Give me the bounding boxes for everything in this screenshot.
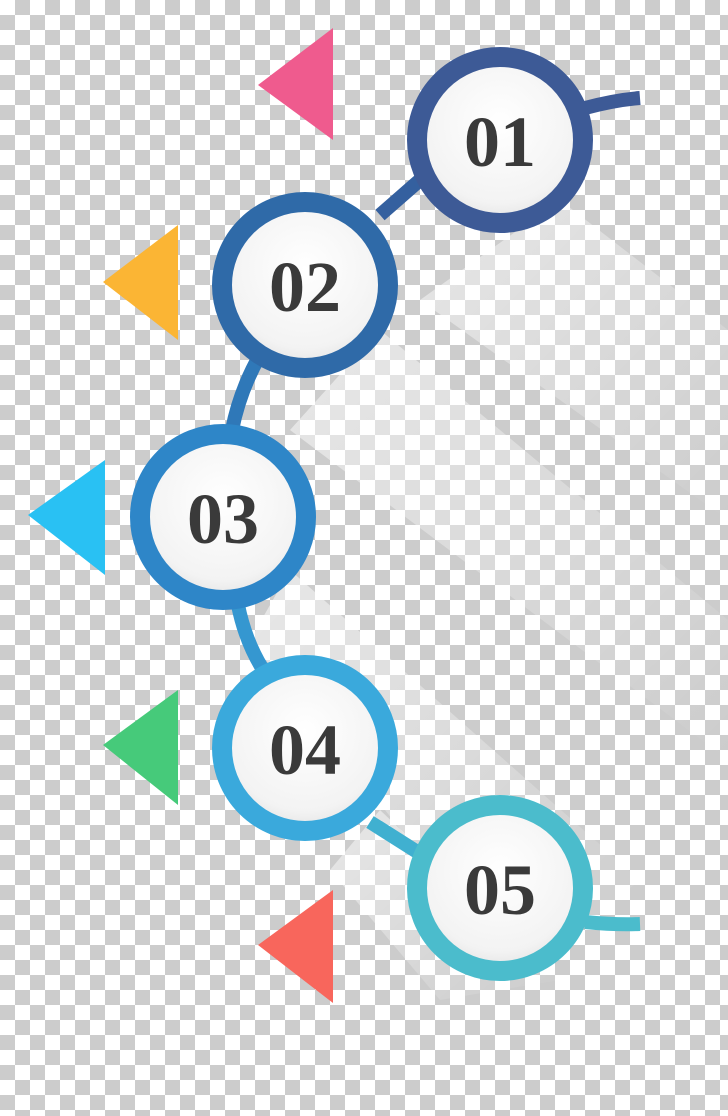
step 04 [222,665,388,831]
triangle: orange [103,225,178,340]
step 05: 05 [464,850,536,930]
step 01 [417,57,583,223]
triangle: pink [258,28,333,140]
step 05 [417,805,583,971]
step 03: 03 [187,479,259,559]
long shadow [250,200,728,1000]
triangle: cyan [28,460,105,575]
step 03 [140,434,306,600]
step 01: 01 [464,102,536,182]
step 02 [222,202,388,368]
triangle: green [103,690,178,805]
step 04: 04 [269,710,341,790]
connector path [232,98,640,924]
step 02: 02 [269,247,341,327]
triangle: red [258,890,333,1003]
